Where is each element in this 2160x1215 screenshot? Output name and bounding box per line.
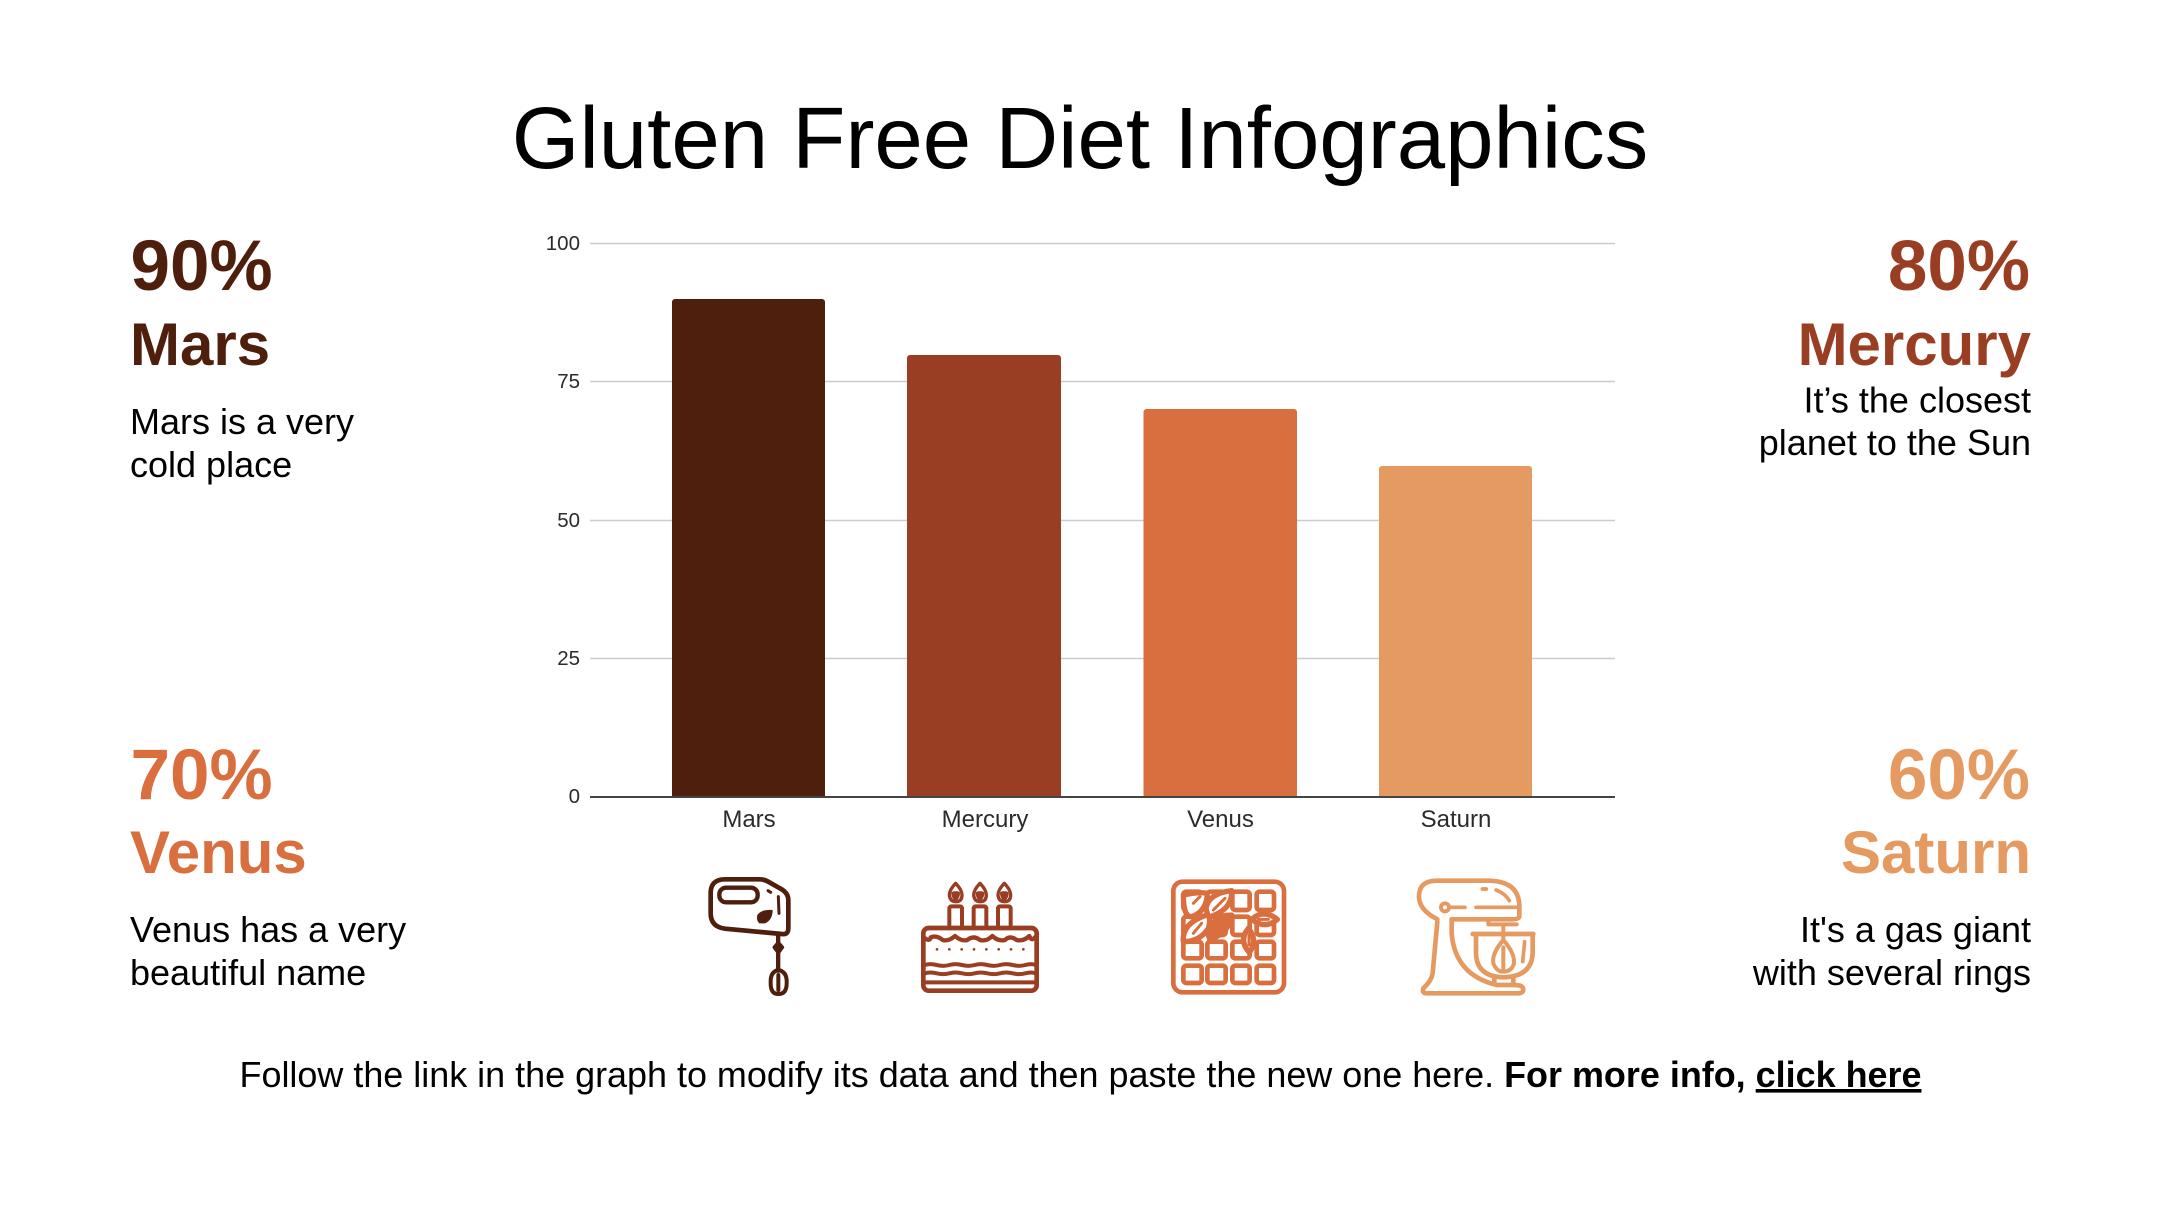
icon: hand mixer xyxy=(711,879,788,994)
x axis labels: Saturn xyxy=(1421,806,1491,833)
y axis labels: 100 xyxy=(546,232,580,255)
x axis labels: Mercury xyxy=(942,806,1028,833)
y axis labels xyxy=(546,232,580,808)
Mars description: cold place xyxy=(130,444,292,485)
Mars description: Mars is a very xyxy=(130,401,354,442)
icon: stand mixer xyxy=(1419,881,1533,993)
footer note: Follow the link in the graph to modify its data and then paste the new one here. For more info, click here xyxy=(240,1054,1921,1095)
y axis labels: 0 xyxy=(569,785,580,808)
bar: Mars xyxy=(672,299,825,797)
Venus description: Venus has a very xyxy=(130,909,406,950)
Mercury percentage: 80% xyxy=(1888,227,2030,306)
Mercury description: It’s the closest xyxy=(1804,380,2031,420)
panel: Venus stat xyxy=(130,736,406,993)
y axis labels: 50 xyxy=(557,509,580,532)
panel: Mercury stat xyxy=(1759,227,2032,463)
Venus name: Venus xyxy=(130,819,307,886)
Venus description: beautiful name xyxy=(130,952,366,993)
icon: waffle xyxy=(1173,882,1284,992)
bar chart xyxy=(546,232,1615,833)
Mercury description: planet to the Sun xyxy=(1759,422,2031,463)
Saturn description: It's a gas giant xyxy=(1800,909,2031,950)
panel: Saturn stat xyxy=(1752,736,2031,993)
bar: Saturn xyxy=(1379,466,1532,797)
y axis labels: 75 xyxy=(557,370,580,393)
Mercury name: Mercury xyxy=(1798,311,2032,378)
Mars percentage: 90% xyxy=(130,227,273,306)
panel: Mars stat xyxy=(130,227,354,485)
title: Gluten Free Diet Infographics xyxy=(512,90,1648,187)
Saturn percentage: 60% xyxy=(1888,736,2030,815)
x axis labels: Venus xyxy=(1187,806,1254,833)
x axis labels: Mars xyxy=(722,806,776,833)
y axis labels: 25 xyxy=(557,647,580,670)
Saturn description: with several rings xyxy=(1752,952,2031,993)
Mars name: Mars xyxy=(130,311,270,378)
bar: Venus xyxy=(1144,409,1297,797)
Saturn name: Saturn xyxy=(1841,819,2031,886)
x axis labels xyxy=(722,806,1491,833)
Venus percentage: 70% xyxy=(130,736,273,815)
icon: birthday cake xyxy=(923,883,1037,991)
bar: Mercury xyxy=(907,355,1061,797)
